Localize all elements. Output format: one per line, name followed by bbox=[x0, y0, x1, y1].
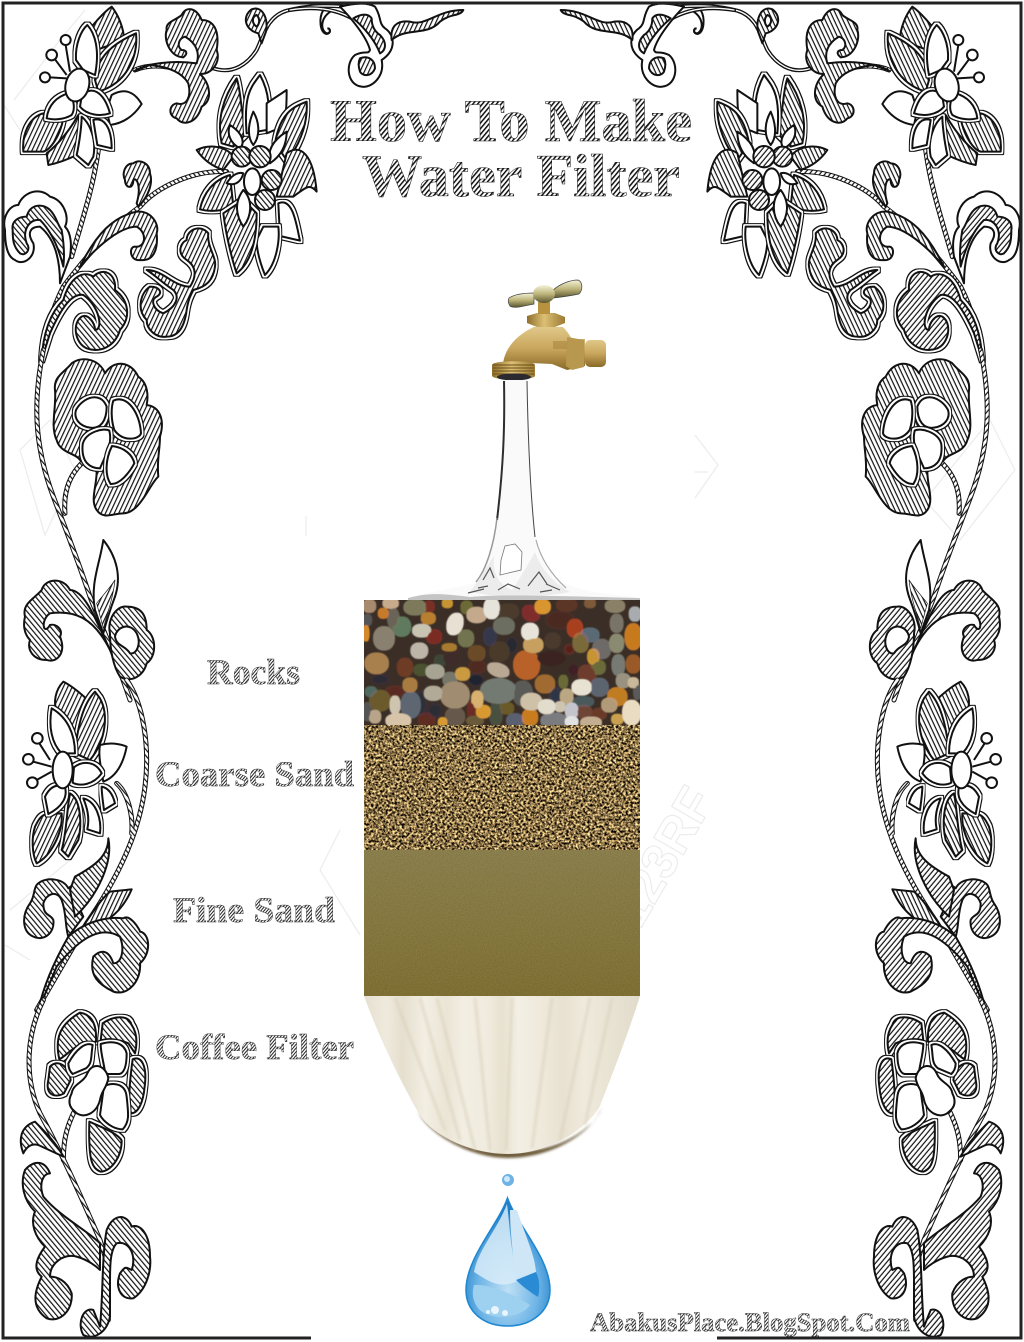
mid stem and flower C bbox=[24, 350, 162, 700]
title bbox=[330, 88, 692, 209]
small water droplet bbox=[502, 1174, 514, 1186]
top centre scroll bbox=[290, 4, 463, 87]
flower E and bottom scrolls bbox=[21, 1000, 150, 1337]
flower A bbox=[23, 7, 142, 165]
stems bbox=[42, 66, 227, 360]
threaded ring bbox=[492, 361, 535, 380]
faint watermarks: 123RF bbox=[601, 778, 725, 936]
big water drop bbox=[466, 1198, 550, 1326]
water stream bbox=[408, 380, 640, 600]
faucet body bbox=[503, 327, 585, 370]
top left flowers and vines bbox=[4, 6, 343, 360]
small clouds beside stem bbox=[124, 161, 151, 207]
cup pleats bbox=[395, 998, 612, 1150]
label: Coarse Sand: Coarse Sand bbox=[155, 754, 354, 794]
flower D and lower clouds bbox=[23, 680, 148, 1010]
cup shadow bbox=[418, 1108, 602, 1158]
label: Rocks: Rocks bbox=[207, 652, 300, 692]
cup body bbox=[364, 996, 640, 1154]
title: How To Make bbox=[330, 88, 692, 154]
handle bbox=[508, 293, 534, 307]
coarse sand layer bbox=[364, 725, 640, 850]
icon: brass faucet bbox=[492, 280, 606, 380]
coffee filter bbox=[364, 996, 640, 1158]
credit text: AbakusPlace.BlogSpot.Com bbox=[590, 1308, 910, 1337]
rocks layer bbox=[363, 598, 641, 728]
flower B bbox=[197, 75, 317, 275]
left floral border bbox=[4, 4, 463, 1337]
faint watermarks bbox=[4, 10, 1015, 960]
fine sand layer bbox=[364, 850, 640, 996]
label: Coffee Filter: Coffee Filter bbox=[155, 1027, 354, 1067]
top vine bbox=[213, 6, 343, 70]
upper hatched cloud bbox=[135, 9, 218, 123]
hex nut bbox=[527, 313, 565, 327]
right floral border bbox=[561, 4, 1020, 1337]
title: Water Filter bbox=[362, 143, 680, 209]
label: Fine Sand: Fine Sand bbox=[173, 890, 335, 930]
